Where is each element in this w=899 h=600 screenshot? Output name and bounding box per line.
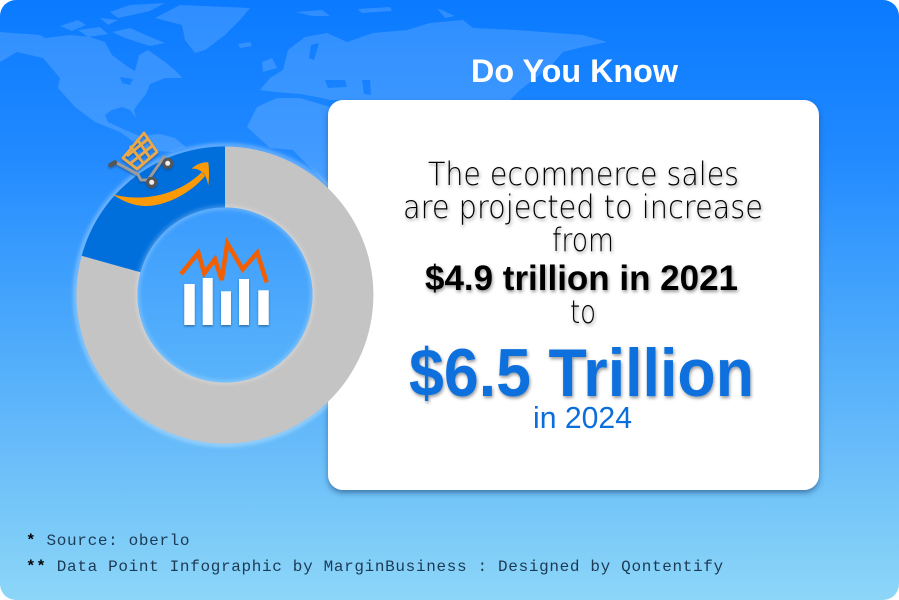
icon: shopping cart bbox=[110, 133, 173, 188]
panel: key fact card bbox=[328, 100, 819, 490]
donut centre bbox=[138, 208, 312, 382]
source notes: ** Data Point Infographic by MarginBusiness : Designed by Qontentify bbox=[26, 558, 724, 576]
title: Do You Know bbox=[471, 53, 678, 89]
source notes bbox=[26, 532, 724, 576]
icon: amazon smile bbox=[113, 162, 209, 206]
text: 2021 value: $4.9 trillion in 2021 bbox=[425, 259, 738, 298]
world map bbox=[0, 3, 607, 190]
text: to: to bbox=[570, 293, 596, 331]
donut chart: ecommerce share bbox=[76, 146, 374, 444]
text: projection intro: The ecommerce sales bbox=[428, 155, 739, 193]
donut highlighted segment bbox=[82, 146, 225, 272]
text: projection intro bbox=[403, 155, 763, 259]
text: projection intro: are projected to increase bbox=[403, 188, 763, 226]
donut remainder segment bbox=[76, 146, 373, 443]
source notes: * Source: oberlo bbox=[26, 532, 190, 550]
icon: bar and line chart bbox=[181, 243, 269, 325]
text: projection intro: from bbox=[552, 221, 614, 259]
text: in 2024: in 2024 bbox=[533, 400, 632, 435]
text: 2024 value: $6.5 Trillion bbox=[409, 335, 754, 411]
